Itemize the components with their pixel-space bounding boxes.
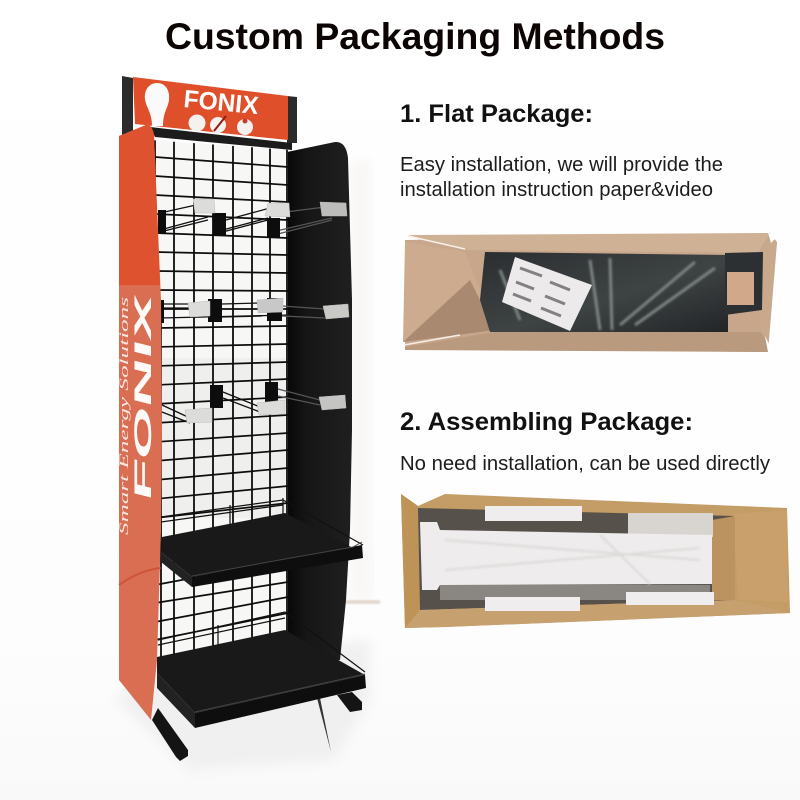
instruction paper [502, 257, 592, 331]
box interior [418, 508, 735, 610]
hooks and label holders [158, 199, 349, 423]
corner notches [404, 236, 465, 345]
heading: assembling package: 2. Assembling Package: [400, 408, 693, 436]
wire grid [150, 140, 288, 660]
box flaps [408, 233, 770, 253]
display stand [116, 76, 366, 761]
plastic-wrapped parts [440, 585, 710, 600]
photo: assembled package box [401, 494, 790, 628]
flat package description: Easy installation, we will provide the [400, 154, 723, 176]
topper brand: FONIX [182, 85, 260, 120]
upper shelf [161, 498, 363, 587]
flat package description: installation instruction paper&video [400, 179, 713, 201]
title: Custom Packaging Methods [165, 16, 665, 57]
stand feet [152, 692, 362, 761]
photo: flat package box [403, 233, 778, 352]
plastic wrap highlights [445, 535, 700, 584]
orange topper with posts [122, 76, 297, 150]
wrapped black parts [480, 252, 728, 332]
topper icon circles [188, 114, 253, 135]
flat package description [400, 154, 723, 201]
side slogan: Smart Energy Solutions [116, 297, 131, 535]
infographic canvas [118, 22, 790, 774]
box insert [727, 272, 754, 305]
orange side panel [116, 125, 162, 720]
heading: flat package: 1. Flat Package: [400, 100, 593, 128]
side brand text: FONIX [130, 290, 157, 503]
icon: light bulb [145, 83, 169, 126]
lower shelf [157, 612, 366, 728]
black right side panel [287, 142, 352, 660]
foam blocks [420, 506, 714, 611]
assembling package description: No need installation, can be used directly [400, 453, 770, 475]
